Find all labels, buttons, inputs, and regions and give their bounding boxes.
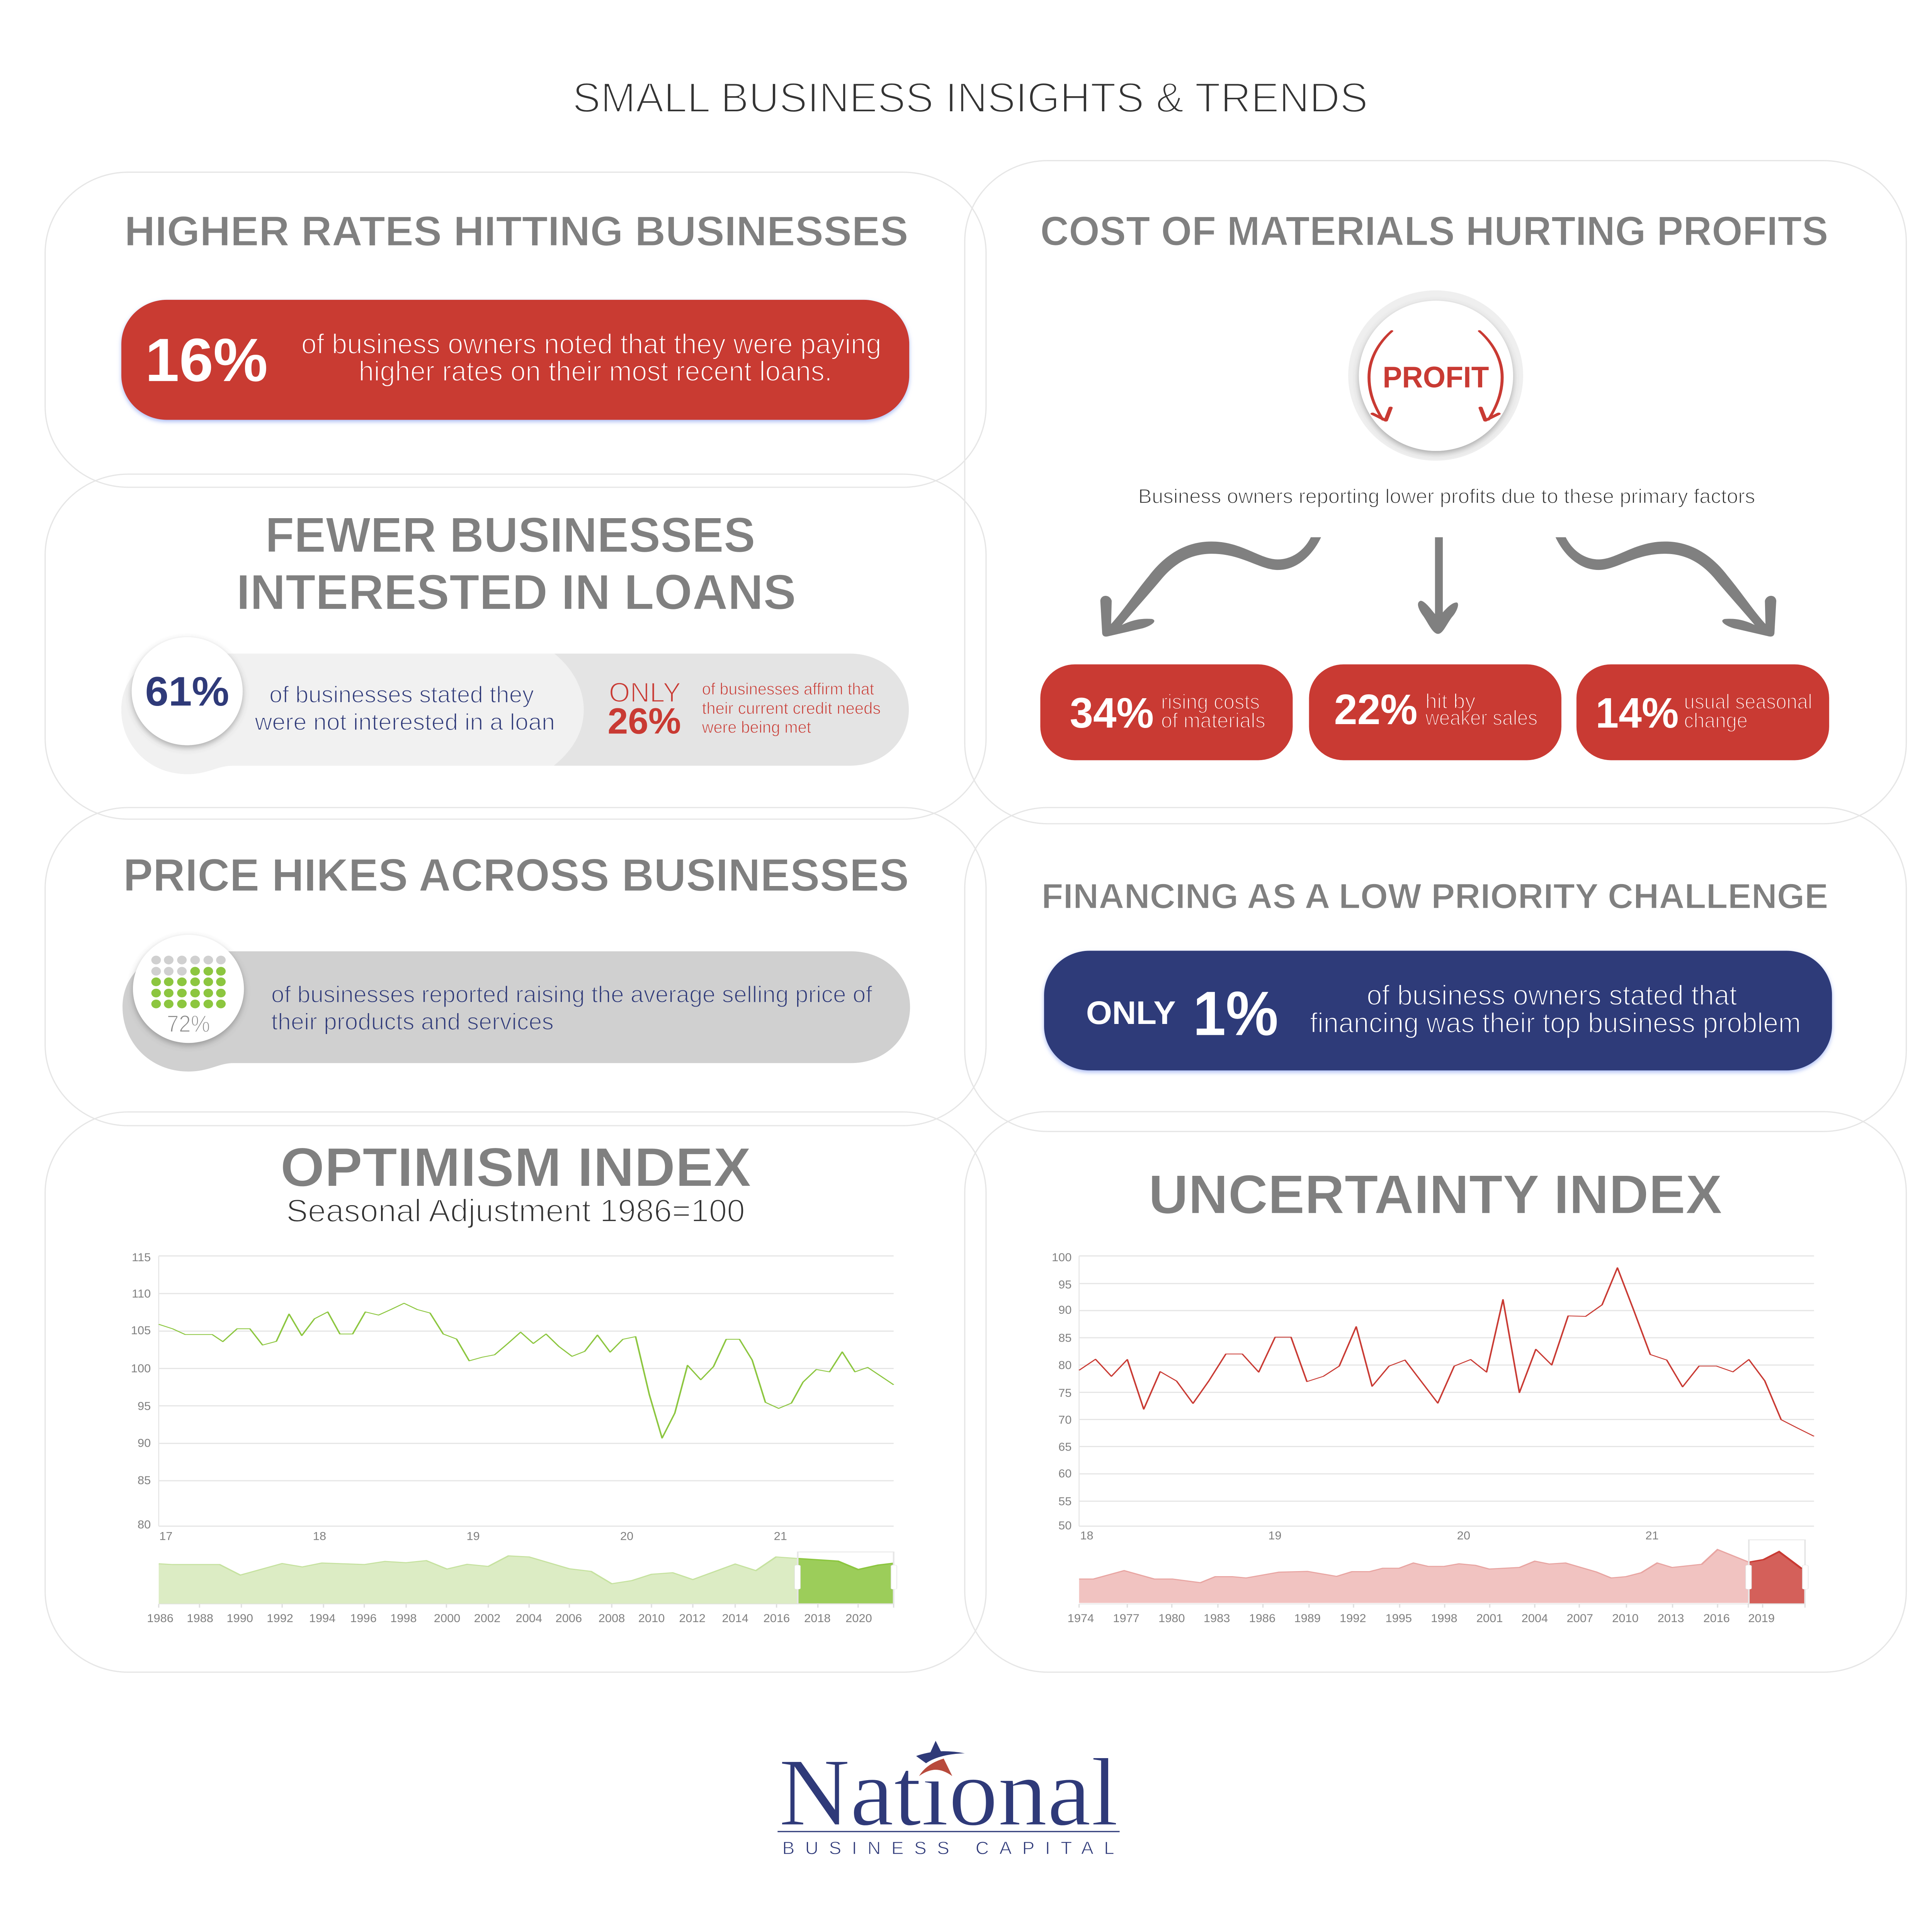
heading: fewer businesses: INTERESTED IN LOANS <box>236 565 796 620</box>
pill: 61% and 26%: were not interested in a loan <box>255 709 555 735</box>
navigator: optimism 1986-2021 <box>147 1552 897 1625</box>
line chart: optimism: 19 <box>466 1530 480 1543</box>
navy callout: only 1%: 1% <box>1193 978 1278 1048</box>
logo: National Business Capital: National <box>779 1739 1118 1846</box>
pill: 61% and 26%: ONLY <box>609 677 681 708</box>
navy callout: only 1% <box>1044 951 1832 1070</box>
line chart: optimism: 100 <box>131 1362 151 1375</box>
pill: 61% and 26%: their current credit needs <box>702 699 881 718</box>
box: 22% weaker sales: 22% <box>1334 686 1417 733</box>
navigator: optimism 1986-2021: 1986 <box>147 1612 173 1625</box>
heading: fewer businesses <box>236 508 796 620</box>
red callout: 16%: higher rates on their most recent loans. <box>359 355 832 387</box>
navigator: uncertainty 1974-2021: 2013 <box>1658 1612 1684 1625</box>
line chart: optimism: 85 <box>138 1474 151 1487</box>
caption: lower profit factors: Business owners reporting lower profits due to these primary factors <box>1138 485 1755 508</box>
line chart: optimism: 21 <box>774 1530 787 1543</box>
pill: 72% price rise <box>122 935 910 1071</box>
box: 22% weaker sales: hit by <box>1425 690 1476 713</box>
line chart: optimism: 115 <box>132 1251 151 1264</box>
title: SMALL BUSINESS INSIGHTS & TRENDS <box>573 74 1368 121</box>
box: 14% seasonal change: 14% <box>1595 689 1679 737</box>
navigator: optimism 1986-2021: 2004 <box>516 1612 542 1625</box>
pill: 72% price rise: 72% <box>167 1010 210 1037</box>
heading: higher rates: HIGHER RATES HITTING BUSINESSES <box>124 208 908 255</box>
pill: 61% and 26% <box>121 637 909 774</box>
line chart: uncertainty: 100 <box>1052 1251 1071 1264</box>
navigator: optimism 1986-2021: 1998 <box>390 1612 417 1625</box>
navigator: uncertainty 1974-2021: 1980 <box>1158 1612 1185 1625</box>
line chart: uncertainty: 85 <box>1058 1332 1071 1345</box>
logo: National Business Capital: BUSINESS CAPITAL <box>782 1838 1114 1858</box>
panel: optimism index <box>45 1112 986 1672</box>
navigator: uncertainty 1974-2021: 2019 <box>1748 1612 1775 1625</box>
line chart: uncertainty: 19 <box>1268 1529 1282 1542</box>
dot matrix: 72% <box>151 956 226 1008</box>
navigator: uncertainty 1974-2021: 1986 <box>1249 1612 1276 1625</box>
navigator: optimism 1986-2021: 1996 <box>350 1612 377 1625</box>
heading: fewer businesses: FEWER BUSINESSES <box>265 508 755 563</box>
navigator: uncertainty 1974-2021: 1989 <box>1294 1612 1321 1625</box>
red callout: 16%: of business owners noted that they were paying <box>301 328 881 360</box>
navigator: uncertainty 1974-2021 <box>1068 1540 1808 1625</box>
line chart: uncertainty: 80 <box>1058 1359 1071 1372</box>
line chart: optimism: 95 <box>138 1400 151 1413</box>
navigator: uncertainty 1974-2021: 1998 <box>1431 1612 1458 1625</box>
line chart: uncertainty: 75 <box>1058 1386 1071 1400</box>
box: 14% seasonal change: usual seasonal <box>1684 690 1812 713</box>
arrow: to 34% <box>1100 537 1321 637</box>
navigator: optimism 1986-2021: 1988 <box>187 1612 213 1625</box>
pill: 61% and 26%: were being met <box>702 718 811 736</box>
navigator: optimism 1986-2021: 2006 <box>556 1612 582 1625</box>
panel: fewer businesses <box>45 474 986 819</box>
navigator: uncertainty 1974-2021: 1977 <box>1113 1612 1139 1625</box>
line chart: optimism: 105 <box>131 1324 151 1337</box>
line chart: optimism: 17 <box>159 1530 172 1543</box>
line chart: uncertainty <box>1052 1251 1814 1542</box>
heading: price hikes: PRICE HIKES ACROSS BUSINESSES <box>123 850 909 901</box>
pill: 61% and 26%: 26% <box>608 701 681 742</box>
line chart: optimism: 110 <box>132 1287 151 1300</box>
arrow: to 22% <box>1418 537 1458 634</box>
icon: profit circle: PROFIT <box>1383 361 1489 394</box>
navigator: optimism 1986-2021: 2014 <box>722 1612 748 1625</box>
subheading: seasonal adjustment: Seasonal Adjustment 1986=100 <box>286 1192 745 1228</box>
pill: 61% and 26%: 61% <box>145 668 229 714</box>
red callout: 16%: 16% <box>145 326 268 394</box>
line chart: optimism <box>131 1251 894 1543</box>
icon: logo star <box>916 1741 965 1776</box>
line chart: optimism: 18 <box>313 1530 326 1543</box>
box: 34% rising costs: 34% <box>1070 689 1154 737</box>
panel: uncertainty index <box>965 1112 1906 1672</box>
navigator: uncertainty 1974-2021: 1983 <box>1204 1612 1230 1625</box>
line chart: uncertainty: 60 <box>1058 1467 1071 1480</box>
navigator: uncertainty 1974-2021: 1995 <box>1385 1612 1412 1625</box>
line chart: uncertainty: 95 <box>1058 1278 1071 1291</box>
line chart: optimism: 90 <box>138 1437 151 1449</box>
heading: optimism index: OPTIMISM INDEX <box>280 1136 751 1198</box>
pill: 72% price rise: their products and services <box>271 1009 554 1034</box>
box: 22% weaker sales <box>1309 664 1561 760</box>
navigator: uncertainty 1974-2021: 2004 <box>1522 1612 1548 1625</box>
navigator: uncertainty 1974-2021: 1974 <box>1068 1612 1094 1625</box>
navigator: uncertainty 1974-2021: 2007 <box>1566 1612 1593 1625</box>
navigator: optimism 1986-2021: 1994 <box>309 1612 336 1625</box>
box: 34% rising costs: rising costs <box>1161 690 1260 714</box>
red callout: 16% <box>121 300 909 420</box>
panel: financing <box>965 808 1906 1131</box>
box: 14% seasonal change <box>1577 664 1829 760</box>
navigator: optimism 1986-2021: 2008 <box>599 1612 625 1625</box>
icon: profit circle <box>1348 290 1523 461</box>
navy callout: only 1%: financing was their top business problem <box>1310 1007 1801 1039</box>
navigator: optimism 1986-2021: 2000 <box>434 1612 460 1625</box>
navy callout: only 1%: of business owners stated that <box>1367 979 1737 1011</box>
navigator: optimism 1986-2021: 1992 <box>267 1612 293 1625</box>
navy callout: only 1%: ONLY <box>1086 995 1176 1031</box>
heading: cost of materials: COST OF MATERIALS HURTING PROFITS <box>1040 208 1828 254</box>
navigator: uncertainty 1974-2021: 2016 <box>1703 1612 1730 1625</box>
box: 34% rising costs: of materials <box>1161 709 1265 732</box>
box: 34% rising costs <box>1040 664 1293 760</box>
line chart: uncertainty: 50 <box>1058 1519 1071 1532</box>
navigator: optimism 1986-2021: 2010 <box>638 1612 665 1625</box>
pill: 61% and 26%: of businesses affirm that <box>702 680 874 698</box>
navigator: uncertainty 1974-2021: 2001 <box>1476 1612 1503 1625</box>
line chart: uncertainty: 18 <box>1080 1529 1094 1542</box>
line chart: optimism: 20 <box>620 1530 633 1543</box>
line chart: uncertainty: 55 <box>1058 1495 1071 1508</box>
box: 14% seasonal change: change <box>1684 709 1748 732</box>
navigator: optimism 1986-2021: 2012 <box>679 1612 706 1625</box>
line chart: uncertainty: 20 <box>1457 1529 1470 1542</box>
navigator: optimism 1986-2021: 2002 <box>474 1612 500 1625</box>
navigator: optimism 1986-2021: 2018 <box>804 1612 831 1625</box>
pill: 72% price rise: of businesses reported raising the average selling price of <box>271 981 872 1007</box>
heading: uncertainty index: UNCERTAINTY INDEX <box>1148 1164 1722 1225</box>
panel: price hikes <box>45 808 986 1126</box>
box: 22% weaker sales: weaker sales <box>1425 706 1537 730</box>
panel: cost of materials <box>965 161 1906 824</box>
line chart: optimism: 80 <box>138 1518 151 1531</box>
navigator: optimism 1986-2021: 2016 <box>764 1612 790 1625</box>
pill: 61% and 26%: of businesses stated they <box>269 682 534 707</box>
heading: financing: FINANCING AS A LOW PRIORITY CHALLENGE <box>1042 877 1828 916</box>
line chart: uncertainty: 90 <box>1058 1303 1071 1316</box>
navigator: uncertainty 1974-2021: 1992 <box>1340 1612 1366 1625</box>
navigator: optimism 1986-2021: 2020 <box>845 1612 872 1625</box>
arrow: to 14% <box>1556 537 1776 637</box>
panel: higher rates <box>45 172 986 487</box>
navigator: optimism 1986-2021: 1990 <box>226 1612 253 1625</box>
line chart: uncertainty: 21 <box>1645 1529 1659 1542</box>
navigator: uncertainty 1974-2021: 2010 <box>1612 1612 1639 1625</box>
line chart: uncertainty: 70 <box>1058 1413 1071 1426</box>
line chart: uncertainty: 65 <box>1058 1440 1071 1454</box>
